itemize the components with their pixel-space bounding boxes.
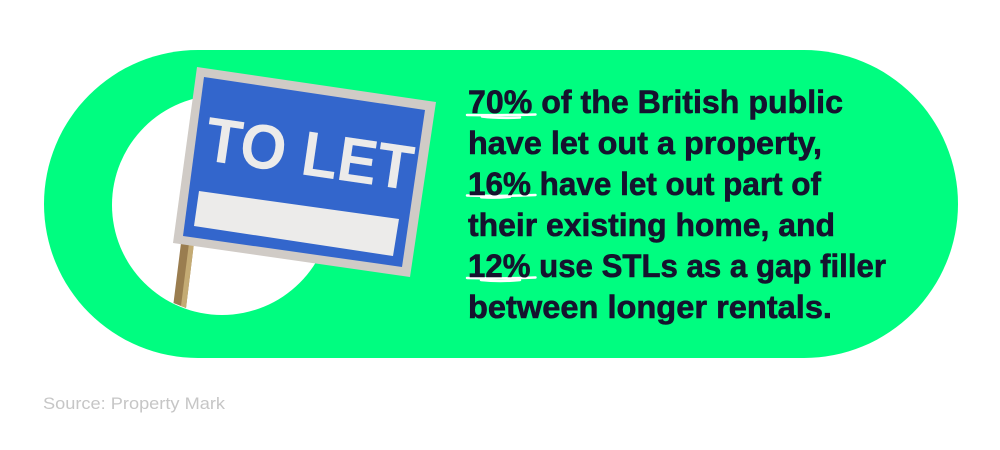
underline: 16% — [467, 195, 536, 198]
sign blue face — [183, 77, 425, 267]
sign frame — [173, 67, 436, 277]
sign post — [174, 243, 194, 308]
main statement text: have let out a property, — [468, 125, 822, 161]
sign blank panel — [194, 191, 399, 256]
main statement text: 12% use STLs as a gap filler — [468, 248, 886, 284]
panel: green pill — [44, 50, 958, 358]
icon: to let sign — [173, 67, 436, 308]
main statement text: between longer rentals. — [468, 289, 832, 325]
main statement text: 16% have let out part of — [468, 166, 821, 202]
main statement text: 70% of the British public — [468, 84, 843, 120]
underline: 12% — [467, 278, 536, 281]
main statement text — [468, 84, 886, 325]
sign lettering: TO LET — [201, 105, 418, 204]
white circle behind sign — [112, 95, 332, 315]
underline: 70% — [467, 114, 536, 118]
main statement text: their existing home, and — [468, 207, 835, 243]
source note: Source: Property Mark — [43, 394, 226, 413]
